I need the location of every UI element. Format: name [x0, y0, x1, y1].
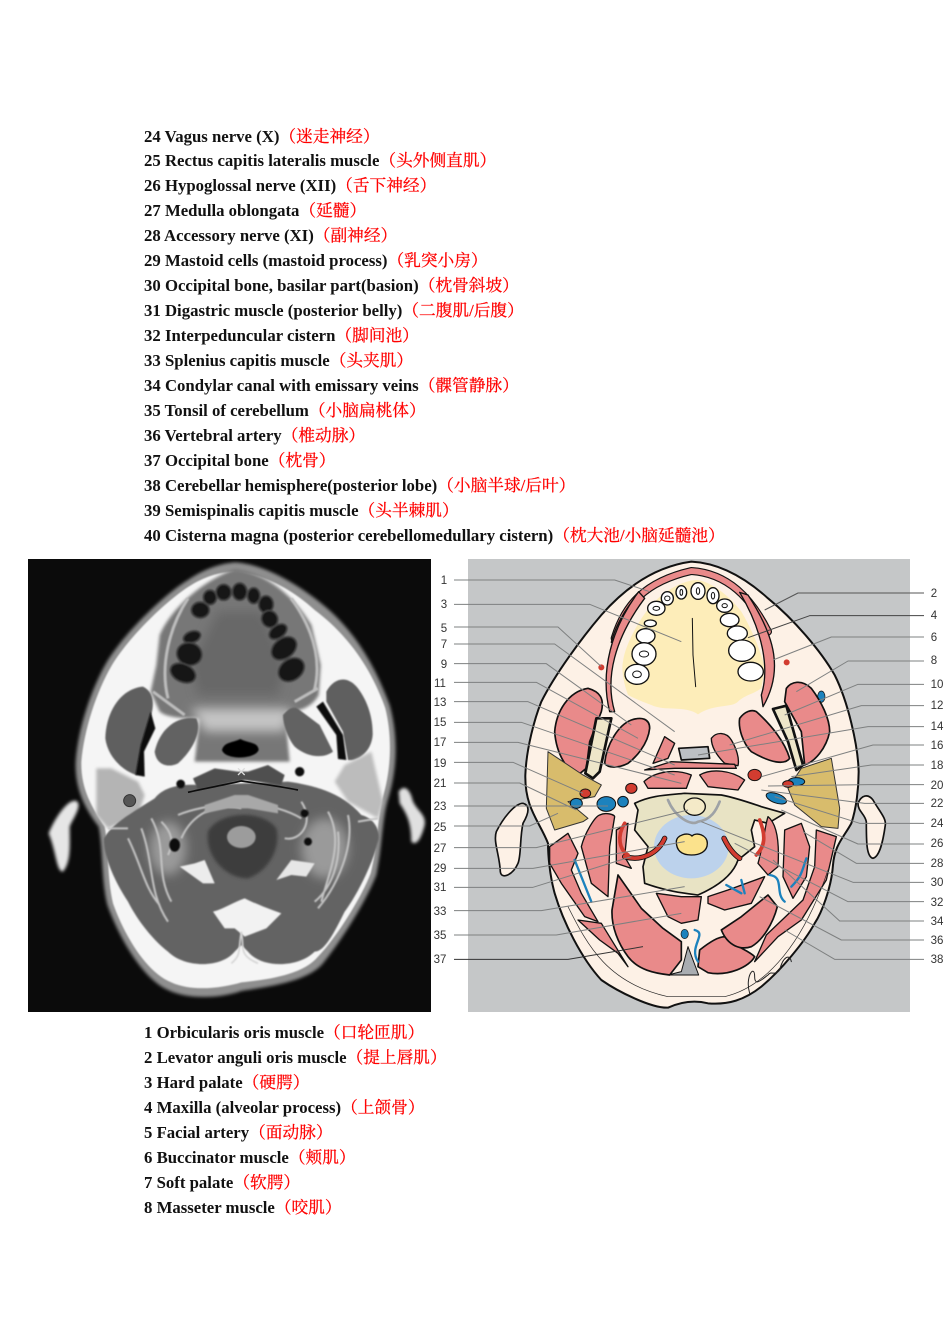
drawing: blue vessel — [681, 929, 688, 939]
text block: structure list 24 to 40: 34 Condylar canal with emissary veins（髁管静脉） — [144, 376, 519, 395]
right index numbers: 28 — [931, 858, 943, 870]
left index numbers: 35 — [434, 930, 446, 942]
drawing: dens region — [684, 798, 705, 815]
drawing: right masseter — [785, 682, 830, 765]
drawing: occipital bone ring — [635, 793, 785, 895]
MRI: palate centre — [191, 612, 285, 695]
MRI: soft palate bright band — [191, 708, 291, 732]
MRI: skin contour — [76, 562, 396, 997]
text block: structure list 1 to 8: 3 Hard palate（硬腭） — [144, 1073, 309, 1092]
right index numbers: 20 — [931, 780, 943, 792]
drawing: vertebral arteries outline — [625, 838, 740, 858]
MRI: right masseter — [326, 680, 373, 760]
text block: structure list 1 to 8: 6 Buccinator muscle（颊肌） — [144, 1148, 356, 1167]
left index numbers: 5 — [441, 623, 447, 635]
text block: structure list 24 to 40: 29 Mastoid cells (mastoid process)（乳突小房） — [144, 251, 488, 270]
MRI: cisterna magna fat — [213, 898, 281, 937]
text block: structure list 24 to 40: 24 Vagus nerve (X)（迷走神经） — [144, 126, 380, 146]
right index numbers: 4 — [931, 610, 938, 622]
left index numbers: 7 — [441, 639, 447, 651]
MRI: midline nuchal septum — [231, 932, 258, 963]
drawing: buccal vein — [818, 691, 825, 702]
drawing: right inner muscle — [708, 877, 765, 910]
text block: structure list 1 to 8: 5 Facial artery（面动脉） — [144, 1123, 333, 1142]
drawing: right ear — [858, 796, 885, 858]
left index numbers — [434, 575, 447, 966]
text block: structure list 24 to 40: 25 Rectus capitis lateralis muscle（头外侧直肌） — [144, 151, 496, 170]
drawing: tooth pulp marks — [633, 588, 727, 678]
MRI: left masseter — [105, 687, 153, 775]
drawing: centre muscle — [656, 893, 701, 923]
leader lines right — [698, 593, 924, 959]
left index numbers: 25 — [434, 822, 446, 834]
right index numbers: 22 — [931, 798, 943, 810]
MRI: left parotid gland — [96, 768, 145, 828]
text block: structure list 1 to 8 — [144, 1023, 447, 1217]
MRI: black line anterior to clivus — [188, 781, 298, 792]
MRI: fat streaks around neck — [108, 802, 378, 922]
text block: structure list 24 to 40: 31 Digastric muscle (posterior belly)（二腹肌/后腹） — [144, 301, 524, 320]
left index numbers: 13 — [434, 697, 446, 709]
MRI: left pterygoid — [155, 718, 198, 766]
drawing: digastric posterior belly — [758, 817, 778, 875]
drawing: right longus capitis — [700, 771, 745, 790]
drawing: left levator — [611, 595, 638, 642]
right index numbers: 18 — [931, 760, 943, 772]
drawing: right parotid gland — [788, 758, 840, 828]
right index numbers: 34 — [931, 916, 944, 928]
right index numbers: 24 — [931, 818, 944, 830]
drawing: right semispinalis — [698, 937, 755, 974]
right index numbers: 32 — [931, 897, 943, 909]
MRI: subcutaneous fat — [81, 572, 390, 988]
drawing: teeth — [625, 583, 763, 684]
drawing: left mandible ramus — [585, 718, 611, 778]
text block: structure list 24 to 40: 36 Vertebral artery（椎动脉） — [144, 426, 365, 445]
left index numbers: 21 — [434, 778, 446, 790]
right index numbers: 26 — [931, 838, 943, 850]
drawing: orbicularis oris muscle — [615, 571, 768, 638]
drawing: left oblique band — [578, 920, 628, 967]
left index numbers: 29 — [434, 863, 446, 875]
drawing: left buccinator — [606, 592, 645, 712]
drawing: veins — [575, 858, 806, 962]
drawing: right lateral muscle — [783, 823, 810, 898]
MRI: lateral mucosa streaks — [153, 598, 318, 715]
MRI: nasopharyngeal airway — [222, 739, 259, 757]
left index numbers: 27 — [434, 843, 446, 855]
right index numbers — [931, 588, 944, 966]
text block: structure list 24 to 40: 40 Cisterna magna (posterior cerebellomedullary cistern)（枕大池/小脑延髓池） — [144, 526, 725, 544]
left index numbers: 1 — [441, 575, 447, 587]
left index numbers: 15 — [434, 717, 446, 729]
MRI: longus muscles — [193, 765, 285, 790]
right index numbers: 10 — [931, 679, 943, 691]
drawing: pharyngeal band — [645, 762, 736, 770]
MRI: midline septum at pharynx — [238, 768, 245, 775]
MRI: left ear — [49, 801, 79, 872]
left index numbers: 19 — [434, 758, 446, 770]
drawing: jugular vein and vessel group — [570, 778, 805, 811]
text block: structure list 24 to 40: 38 Cerebellar hemisphere(posterior lobe)（小脑半球/后叶） — [144, 476, 575, 495]
drawing: medulla oblongata — [676, 834, 707, 855]
right index numbers: 38 — [931, 954, 943, 966]
drawing: left splenius and semispinalis — [612, 875, 681, 975]
leader lines left — [454, 580, 688, 959]
MRI: facial soft tissue and palate — [151, 569, 321, 762]
MRI: vessel flow voids — [169, 767, 312, 852]
drawing: cistern around medulla — [654, 815, 729, 878]
right index numbers: 6 — [931, 632, 937, 644]
text block: structure list 24 to 40: 32 Interpeduncular cistern（脚间池） — [144, 326, 419, 345]
right index numbers: 12 — [931, 700, 943, 712]
drawing: hard palate — [622, 580, 765, 714]
text block: structure list 1 to 8: 1 Orbicularis oris muscle（口轮匝肌） — [144, 1023, 424, 1042]
drawing: right mandible ramus — [773, 706, 803, 770]
MRI: retromandibular vein — [124, 795, 136, 807]
drawing: right buccinator — [740, 592, 775, 707]
MRI: right ear — [399, 788, 425, 843]
text block: structure list 1 to 8: 2 Levator anguli oris muscle（提上唇肌） — [144, 1048, 447, 1067]
MRI: right mandible gap — [316, 702, 346, 760]
drawing: lower half of anatomy — [550, 769, 836, 997]
MRI: lateral bright tissue patches — [150, 818, 348, 878]
left index numbers: 23 — [434, 801, 446, 813]
left index numbers: 17 — [434, 737, 446, 749]
text block: structure list 24 to 40: 37 Occipital bone（枕骨） — [144, 451, 335, 470]
MRI: dark CSF around medulla — [208, 815, 277, 878]
drawing: left medial pterygoid — [605, 718, 650, 767]
drawing: right tensor muscle — [711, 734, 738, 766]
drawing: head outline skin — [525, 562, 859, 1008]
anatomical drawing panel — [434, 559, 944, 1012]
text block: structure list 24 to 40: 39 Semispinalis capitis muscle（头半棘肌） — [144, 501, 459, 520]
drawing: rectus lateralis — [616, 823, 631, 868]
text block: structure list 24 to 40: 30 Occipital bone, basilar part(basion)（枕骨斜坡） — [144, 276, 519, 295]
left index numbers: 9 — [441, 659, 447, 671]
drawing: left ear — [495, 803, 528, 876]
text block: structure list 1 to 8: 8 Masseter muscle（咬肌） — [144, 1198, 342, 1217]
drawing: vertebral artery fill — [620, 820, 764, 858]
drawing: left longus capitis — [644, 772, 691, 788]
MRI: left bright fat — [180, 860, 215, 883]
right index numbers: 14 — [931, 721, 944, 733]
text block: structure list 24 to 40: 35 Tonsil of cerebellum（小脑扁桃体） — [144, 401, 426, 420]
left index numbers: 31 — [434, 882, 446, 894]
drawing: right medial pterygoid — [739, 711, 790, 762]
drawing: facial arteries — [598, 659, 790, 670]
right index numbers: 8 — [931, 655, 937, 667]
MRI: right bright fat — [276, 860, 315, 880]
drawing: right sternocleidomastoid — [755, 830, 836, 962]
MRI: teeth — [167, 583, 309, 687]
text block: structure list 24 to 40: 26 Hypoglossal nerve (XII)（舌下神经） — [144, 176, 436, 195]
drawing: artist signature — [748, 957, 791, 993]
drawing: nasopharynx — [679, 747, 710, 760]
MRI: left mandible gap — [135, 712, 155, 777]
left index numbers: 11 — [434, 678, 446, 690]
drawing: left masseter — [555, 688, 602, 775]
drawing: alar ligament — [668, 800, 720, 823]
drawing: inner fat contour — [568, 870, 828, 997]
left index numbers: 37 — [434, 954, 446, 966]
MRI scan panel — [28, 559, 431, 1012]
MRI: medulla oblongata — [227, 826, 256, 848]
drawing: left parapharyngeal muscle — [581, 814, 615, 897]
drawing: carotid arteries — [580, 769, 793, 798]
drawing: nuchal midline triangle — [668, 947, 699, 975]
text block: structure list 1 to 8: 7 Soft palate（软腭） — [144, 1173, 300, 1192]
drawing: right cerebellar muscle — [721, 895, 777, 948]
drawing: left parotid gland — [546, 752, 601, 830]
drawing: left tensor muscle — [653, 737, 675, 763]
right index numbers: 36 — [931, 935, 943, 947]
right index numbers: 30 — [931, 877, 943, 889]
MRI: posterior neck muscles — [104, 782, 379, 964]
text block: structure list 24 to 40 — [144, 126, 725, 545]
text block: structure list 1 to 8: 4 Maxilla (alveolar process)（上颌骨） — [144, 1098, 425, 1117]
right index numbers: 2 — [931, 588, 937, 600]
MRI: right pterygoid — [283, 708, 333, 756]
MRI: bright marrow of clivus — [205, 795, 278, 813]
left index numbers: 3 — [441, 599, 447, 611]
drawing: left sternocleidomastoid — [550, 833, 598, 922]
left index numbers: 33 — [434, 906, 446, 918]
right index numbers: 16 — [931, 740, 943, 752]
text block: structure list 24 to 40: 28 Accessory nerve (XI)（副神经） — [144, 226, 397, 245]
text block: structure list 24 to 40: 27 Medulla oblongata（延髓） — [144, 201, 366, 220]
text block: structure list 24 to 40: 33 Splenius capitis muscle（头夹肌） — [144, 351, 413, 370]
drawing: palatal suture — [692, 618, 696, 687]
MRI: right parotid gland — [335, 752, 383, 818]
